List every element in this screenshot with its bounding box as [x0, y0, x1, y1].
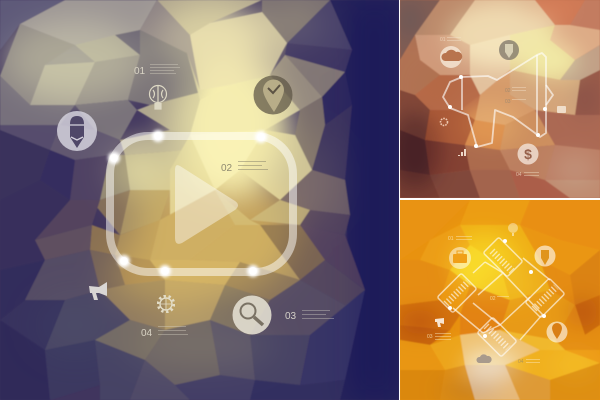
megaphone outline [443, 53, 553, 147]
soft colour field: orange [400, 200, 600, 400]
panel: main purple and gold low-poly [0, 0, 399, 400]
facet mesh: coral [400, 0, 600, 198]
panel: bottom-right orange low-poly [400, 200, 600, 400]
icon: face [499, 40, 519, 60]
labels: orange panel: 03 [427, 334, 433, 340]
icon: cloud rain [440, 46, 462, 68]
label 02: 02 [221, 163, 233, 174]
label 04 [141, 326, 188, 336]
labels: coral panel: 02 [505, 88, 511, 94]
labels: coral panel: 03 [505, 99, 511, 105]
label 03 [285, 310, 334, 319]
frame nodes [108, 130, 267, 277]
icon: megaphone [435, 318, 444, 327]
icon: cloud [476, 354, 492, 363]
soft colour field: main [0, 0, 399, 400]
labels: orange panel: 02 [490, 296, 496, 302]
label 02 [221, 161, 268, 171]
icon: gear [158, 296, 174, 312]
handshake diamond outline [437, 237, 565, 357]
facet mesh: main [0, 0, 399, 400]
icon: dollar: $ [524, 146, 532, 162]
icon: megaphone [89, 282, 107, 300]
labels: coral panel [440, 37, 539, 178]
icon: brain bulb [150, 86, 166, 109]
label 04: 04 [141, 328, 153, 339]
labels: orange panel [427, 236, 540, 365]
panel: top-right coral low-poly [390, 0, 600, 198]
play triangle [175, 165, 238, 244]
icon: bulb [508, 223, 518, 236]
label 01: 01 [134, 66, 146, 77]
finger stripes [446, 251, 556, 348]
icon: briefcase [449, 247, 471, 269]
labels: orange panel: 01 [448, 236, 454, 242]
icon: magnifier [232, 296, 272, 334]
icon: pencil [57, 111, 97, 151]
megaphone nodes [448, 75, 547, 148]
diamond nodes [448, 239, 546, 338]
icon: dollar [518, 144, 538, 164]
icon: pencil [534, 246, 556, 266]
facet mesh: orange [400, 200, 600, 400]
icon: play camera [557, 106, 566, 113]
icon: chart [458, 149, 466, 156]
icon: gear small [440, 118, 448, 126]
rounded video frame [110, 136, 293, 272]
labels: coral panel: 04 [516, 172, 522, 178]
icon: pin [546, 322, 568, 342]
label 01 [134, 64, 180, 74]
labels: coral panel: 01 [440, 37, 446, 43]
labels: orange panel: 04 [518, 359, 524, 365]
icon: map pin check [254, 76, 292, 114]
label 03: 03 [285, 311, 297, 322]
soft colour field: coral [390, 0, 600, 198]
